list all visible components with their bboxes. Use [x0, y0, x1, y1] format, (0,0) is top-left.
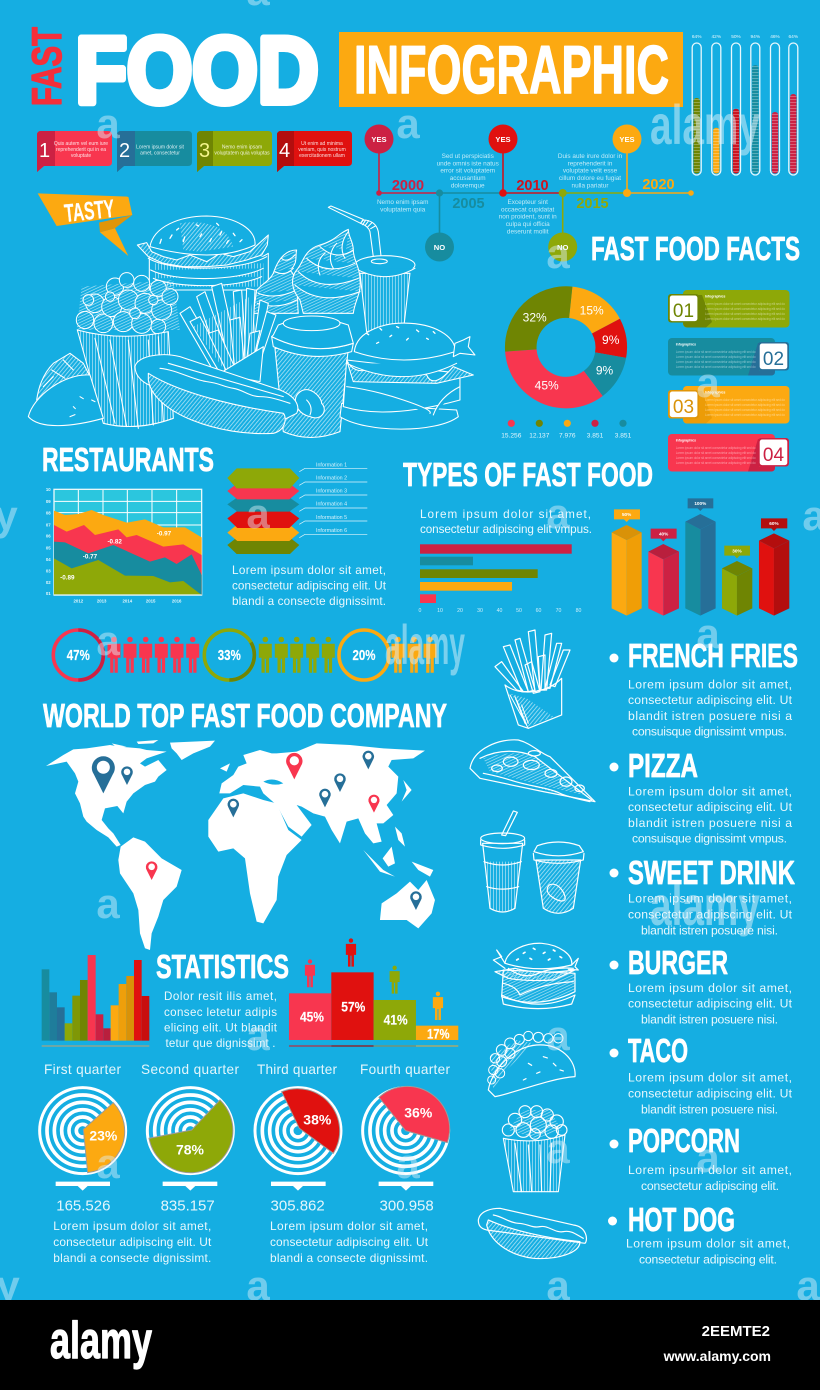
area chart: 2015	[146, 598, 156, 603]
item: SWEET DRINK	[610, 854, 795, 937]
card 01: Lorem ipsum dolor sit amet consectetur adipiscing elit sed do	[705, 312, 785, 316]
icon: burger	[493, 943, 578, 1009]
item: SWEET DRINK: consectetur adipiscing elit. Ut	[628, 907, 793, 921]
box 4	[277, 131, 352, 172]
timeline: 2010	[516, 178, 549, 194]
item: POPCORN: consectetur adipiscing elit.	[641, 1179, 779, 1193]
timeline	[364, 124, 694, 262]
quarter labels: First quarter	[44, 1062, 121, 1077]
watermarks: a	[796, 1262, 820, 1309]
3D column chart: 30%	[732, 548, 742, 553]
icon: popcorn	[502, 1106, 567, 1192]
area chart: -0.77	[83, 553, 98, 560]
item: FRENCH FRIES: consectetur adipiscing elit. Ut	[628, 693, 793, 707]
timeline: 2020	[642, 177, 675, 193]
item: FRENCH FRIES	[610, 637, 798, 739]
item: HOT DOG: HOT DOG	[628, 1201, 735, 1238]
area chart: 2013	[97, 598, 107, 603]
horizontal bar chart: 20	[457, 608, 463, 614]
box 1: voluptate	[71, 153, 91, 159]
watermarks: alamy	[650, 93, 760, 156]
box 2: amet, consectetur	[140, 150, 180, 156]
area chart: 2014	[123, 598, 133, 603]
percentage ring and people: 20%	[339, 630, 436, 680]
stacked hexagon diagram: Information 4	[316, 502, 347, 508]
donut legend	[501, 420, 632, 440]
timeline: non proident, sunt in	[499, 214, 557, 221]
area chart: 09	[46, 499, 51, 504]
stacked hexagon diagram: Information 5	[316, 515, 347, 521]
stacked hexagon diagram: Information 3	[316, 489, 347, 495]
horizontal bar chart: 10	[437, 608, 443, 614]
text: restaurants description: consectetur adipiscing elit. Ut	[232, 580, 387, 592]
card 02: Lorem ipsum dolor sit amet consectetur adipiscing elit sed do	[676, 350, 756, 354]
item: SWEET DRINK: blandit istren posuere nisi.	[641, 923, 778, 937]
watermarks: a	[246, 1012, 270, 1059]
timeline: YES	[495, 135, 511, 144]
donut legend: 7.976	[559, 432, 576, 440]
watermarks: a	[246, 1262, 270, 1309]
box 3: voluptatem quia voluptas	[214, 150, 270, 156]
podium chart with people	[289, 938, 458, 1047]
item: TACO: blandit istren posuere nisi.	[641, 1102, 778, 1116]
3D column chart: 50%	[622, 512, 632, 517]
ribbon: TASTY: TASTY	[63, 195, 116, 228]
sketch: coffee cup	[272, 316, 353, 437]
text: types description: Lorem ipsum dolor sit amet,	[420, 508, 591, 521]
card 01: 01	[673, 301, 694, 322]
horizontal bar chart: 0	[419, 608, 422, 614]
card 01: Lorem ipsum dolor sit amet consectetur adipiscing elit sed do	[705, 307, 785, 311]
text: types description: consectetur adipiscing elit vmpus.	[420, 523, 592, 536]
text: quarter description left: consectetur adipiscing elit. Ut	[53, 1235, 212, 1249]
horizontal bar chart: 30	[477, 608, 483, 614]
box 1	[37, 131, 112, 172]
sketch: french fries	[180, 283, 276, 382]
percentage ring and people: 33%	[204, 630, 335, 680]
card 04: Lorem ipsum dolor sit amet consectetur adipiscing elit sed do	[676, 461, 756, 465]
radial: fourth quarter: 36%	[404, 1105, 433, 1121]
watermarks: a	[96, 1140, 120, 1187]
title: FAST FOOD: FOOD	[76, 18, 318, 122]
item: HOT DOG	[608, 1201, 790, 1266]
area chart: 2016	[172, 598, 182, 603]
card 02	[668, 338, 789, 376]
card 02: Lorem ipsum dolor sit amet consectetur adipiscing elit sed do	[676, 355, 756, 359]
watermarks: a	[96, 100, 120, 147]
box 1: Quis autem vel eum iure	[54, 141, 108, 147]
box 2	[117, 131, 192, 172]
donut chart	[505, 286, 627, 408]
box 3: 3	[199, 140, 210, 162]
podium chart with people: 45%	[300, 1008, 324, 1024]
radial: second quarter	[147, 1088, 233, 1215]
card 01	[668, 290, 790, 328]
text: types description	[420, 508, 592, 536]
timeline: Duis aute irure dolor in	[558, 153, 623, 160]
quarter labels: Third quarter	[257, 1062, 337, 1077]
donut chart: 45%	[535, 378, 559, 392]
donut legend: 3.851	[615, 432, 632, 440]
watermarks: a	[696, 610, 720, 657]
card 02: Lorem ipsum dolor sit amet consectetur adipiscing elit sed do	[676, 360, 756, 364]
item: PIZZA: consuisque dignissimt vmpus.	[632, 832, 787, 846]
timeline: occaecat cupidatat	[501, 206, 555, 213]
icon: drinks	[481, 811, 584, 913]
card 03: Lorem ipsum dolor sit amet consectetur adipiscing elit sed do	[705, 413, 785, 417]
text: statistics description	[164, 990, 278, 1050]
card 04: Lorem ipsum dolor sit amet consectetur adipiscing elit sed do	[676, 456, 756, 460]
donut legend: 15.256	[501, 432, 522, 440]
timeline: 2005	[452, 196, 485, 212]
text: quarter description right	[270, 1219, 429, 1265]
sketch: drink cup with straw	[328, 206, 415, 332]
horizontal bar chart: 60	[536, 608, 541, 614]
3D column chart: 100%	[694, 501, 707, 506]
card 04: Lorem ipsum dolor sit amet consectetur adipiscing elit sed do	[676, 451, 756, 455]
area chart: -0.97	[157, 530, 172, 537]
item: HOT DOG: consectetur adipiscing elit.	[639, 1252, 777, 1266]
illustration: fast food collage	[28, 206, 475, 437]
text: restaurants description	[232, 564, 387, 608]
timeline: nulla pariatur	[572, 182, 609, 189]
timeline: deserunt mollit	[507, 228, 549, 235]
stacked hexagon diagram: Information 2	[316, 476, 347, 482]
timeline: unde omnis iste natus	[437, 160, 499, 167]
text: statistics description: elicing elit. Ut blandit	[164, 1022, 278, 1034]
item: SWEET DRINK: Lorem ipsum dolor sit amet,	[628, 892, 792, 906]
item: BURGER: Lorem ipsum dolor sit amet,	[628, 981, 792, 995]
text: statistics description: Dolor resit ilis amet,	[164, 990, 277, 1003]
box 4: Ut enim ad minima	[301, 141, 343, 147]
watermarks: a	[546, 1125, 570, 1172]
stacked hexagon diagram: Information 6	[316, 528, 347, 534]
footer band: 2EEMTE2	[702, 1323, 770, 1340]
box 4: exercitationem ullam	[299, 153, 345, 159]
item: POPCORN: Lorem ipsum dolor sit amet,	[628, 1163, 792, 1177]
sketch: small ice cream	[253, 250, 298, 313]
area chart: 06	[46, 534, 51, 539]
heading: WORLD TOP FAST FOOD COMPANY: WORLD TOP FAST FOOD COMPANY	[43, 697, 447, 734]
footer band: www.alamy.com	[663, 1348, 771, 1364]
card 01: Lorem ipsum dolor sit amet consectetur adipiscing elit sed do	[705, 317, 785, 321]
donut chart: 9%	[602, 333, 620, 347]
timeline: NO	[434, 243, 445, 252]
radial: first quarter: 165.526	[56, 1198, 110, 1215]
watermarks: a	[696, 1134, 720, 1181]
stacked hexagon diagram	[227, 462, 367, 554]
card 02: Lorem ipsum dolor sit amet consectetur adipiscing elit sed do	[676, 365, 756, 369]
area chart: 07	[46, 523, 51, 528]
item: PIZZA: Lorem ipsum dolor sit amet,	[628, 784, 792, 798]
timeline: error sit voluptatem	[440, 168, 495, 175]
item: PIZZA: PIZZA	[628, 747, 698, 784]
area chart	[46, 487, 202, 603]
donut chart: 32%	[523, 310, 547, 324]
area chart: 02	[46, 580, 51, 585]
area chart: -0.89	[60, 575, 75, 582]
watermarks: a	[246, 490, 270, 537]
donut legend: 12.137	[529, 432, 550, 440]
percentage ring and people: 20%: 20%	[352, 647, 376, 664]
card 04: Lorem ipsum dolor sit amet consectetur adipiscing elit sed do	[676, 446, 756, 450]
item: FRENCH FRIES: consuisque dignissimt vmpus.	[632, 725, 787, 739]
text: quarter description right: blandi a consecte dignissimt.	[270, 1251, 428, 1265]
podium chart with people: 17%	[427, 1026, 450, 1042]
watermarks: a	[96, 617, 120, 664]
numbered speech boxes	[37, 131, 352, 172]
progress tubes: 64%	[692, 34, 702, 40]
timeline: accusantium	[450, 175, 486, 182]
timeline: YES	[371, 135, 387, 144]
watermarks: a	[396, 100, 420, 147]
card 03	[668, 386, 790, 424]
radial: fourth quarter	[363, 1086, 450, 1215]
card 01: Lorem ipsum dolor sit amet consectetur adipiscing elit sed do	[705, 302, 785, 306]
heading panel: INFOGRAPHIC	[339, 32, 683, 108]
area chart: 08	[46, 510, 51, 515]
footer band	[0, 1300, 820, 1390]
watermarks: a	[546, 490, 570, 537]
percentage ring and people: 47%: 47%	[67, 647, 90, 664]
sketch: back burger	[137, 216, 268, 290]
horizontal bar chart	[419, 544, 581, 614]
donut chart: 9%	[596, 364, 614, 378]
radial: fourth quarter: 300.958	[380, 1198, 434, 1215]
icon: french fries	[495, 630, 570, 728]
item: PIZZA	[610, 747, 793, 846]
3D column chart: 40%	[659, 531, 669, 536]
footer band: alamy	[50, 1312, 152, 1370]
area chart: 01	[46, 591, 51, 596]
item: TACO: consectetur adipiscing elit. Ut	[628, 1086, 793, 1100]
stacked hexagon diagram: Information 1	[316, 462, 347, 468]
timeline: Nemo enim ipsam	[377, 199, 428, 206]
timeline: 2015	[576, 196, 609, 212]
heading: STATISTICS: STATISTICS	[156, 948, 289, 985]
info cards 01-04	[668, 290, 790, 472]
radial: second quarter: 78%	[176, 1142, 205, 1158]
timeline: voluptate velit esse	[563, 168, 618, 175]
area chart: 03	[46, 568, 51, 573]
item: BURGER: consectetur adipiscing elit. Ut	[628, 997, 793, 1011]
box 1: 1	[39, 140, 50, 162]
watermarks: a	[396, 1140, 420, 1187]
item: PIZZA: consectetur adipiscing elit. Ut	[628, 800, 793, 814]
text: quarter description right: consectetur adipiscing elit. Ut	[270, 1235, 429, 1249]
timeline: cillum dolore eu fugiat	[559, 175, 621, 182]
item: POPCORN: POPCORN	[628, 1122, 740, 1159]
item: BURGER: blandit istren posuere nisi.	[641, 1012, 778, 1026]
podium chart with people: 57%	[341, 998, 366, 1014]
item: PIZZA: blandit istren posuere nisi a	[628, 816, 792, 830]
item: BURGER	[610, 944, 793, 1026]
radial: third quarter: 38%	[303, 1111, 332, 1127]
percentage ring and people: 47%	[53, 630, 199, 680]
timeline: Sed ut perspiciatis	[442, 153, 494, 160]
progress tubes: 46%	[770, 34, 781, 40]
item: FRENCH FRIES: Lorem ipsum dolor sit amet,	[628, 678, 792, 692]
percentage ring and people: 33%: 33%	[218, 647, 241, 664]
box 3: Nemo enim ipsam	[222, 144, 262, 150]
box 3	[197, 131, 272, 172]
watermarks: a	[96, 880, 120, 927]
title: FAST FOOD: FAST	[23, 27, 70, 106]
watermarks: a	[546, 1012, 570, 1059]
item: TACO: Lorem ipsum dolor sit amet,	[628, 1071, 792, 1085]
card 02: 02	[763, 349, 784, 370]
area chart: 04	[46, 557, 51, 562]
progress tubes: 94%	[750, 34, 761, 40]
progress tubes: 64%	[788, 34, 799, 40]
3D column chart	[612, 498, 789, 616]
area chart: -0.82	[107, 538, 122, 545]
sketch: taco	[28, 353, 103, 426]
text: statistics description: tetur que dignissimt .	[166, 1037, 276, 1050]
radial: second quarter: 835.157	[161, 1198, 215, 1215]
card 02: Infographics	[676, 342, 696, 346]
item: TACO	[610, 1032, 793, 1116]
timeline: YES	[619, 135, 635, 144]
timeline: NO	[557, 243, 568, 252]
podium chart with people: 41%	[384, 1012, 408, 1028]
timeline: Excepteur sint	[507, 199, 548, 206]
heading: TYPES OF FAST FOOD: TYPES OF FAST FOOD	[403, 456, 653, 493]
item: TACO: TACO	[628, 1032, 688, 1069]
progress tubes	[692, 34, 799, 175]
box 4: 4	[279, 140, 290, 162]
timeline: culpa qui officia	[506, 221, 550, 228]
timeline: doloremque	[451, 182, 485, 189]
card 04	[668, 434, 789, 472]
box 2: Lorem ipsum dolor sit	[136, 144, 185, 150]
watermarks: a	[546, 230, 570, 277]
horizontal bar chart: 70	[556, 608, 561, 614]
sketch: popcorn bucket	[76, 273, 180, 428]
3D column chart: 60%	[769, 521, 779, 526]
radial: first quarter: 23%	[89, 1128, 118, 1144]
card 04: 04	[763, 445, 784, 466]
world map with pins	[46, 740, 435, 950]
text: quarter description left: blandi a consecte dignissimt.	[53, 1251, 211, 1265]
item: BURGER: BURGER	[628, 944, 728, 981]
quarter labels	[44, 1062, 450, 1077]
item: HOT DOG: Lorem ipsum dolor sit amet,	[626, 1236, 790, 1250]
box 1: reprehenderit qui in ea	[56, 147, 106, 153]
sketch: hot dog	[135, 355, 298, 434]
horizontal bar chart: 40	[497, 608, 502, 614]
radial: first quarter	[40, 1088, 126, 1215]
radial: third quarter: 305.862	[271, 1198, 325, 1215]
icon: taco	[488, 1031, 575, 1097]
card 03: Lorem ipsum dolor sit amet consectetur adipiscing elit sed do	[705, 398, 785, 402]
box 4: veniam, quis nostrum	[298, 147, 346, 153]
donut chart: 15%	[580, 304, 604, 318]
timeline: reprehenderit in	[568, 160, 613, 167]
watermarks: alamy	[650, 874, 760, 937]
donut legend: 3.851	[587, 432, 604, 440]
text: restaurants description: blandi a consecte dignissimt.	[232, 595, 386, 608]
sketch: large ice cream	[293, 229, 360, 313]
quarter labels: Second quarter	[141, 1062, 239, 1077]
item: POPCORN	[610, 1122, 792, 1193]
card 03: Infographics	[705, 390, 725, 394]
text: quarter description left: Lorem ipsum dolor sit amet,	[53, 1219, 211, 1233]
quarter labels: Fourth quarter	[360, 1062, 450, 1077]
card 04: Infographics	[676, 438, 696, 442]
watermarks: a	[696, 359, 720, 406]
watermarks: alamy	[385, 613, 465, 676]
area chart: 05	[46, 545, 51, 550]
card 03: Lorem ipsum dolor sit amet consectetur adipiscing elit sed do	[705, 408, 785, 412]
quarter radial charts	[40, 1086, 450, 1215]
heading: RESTAURANTS: RESTAURANTS	[42, 441, 214, 478]
progress tubes: 50%	[731, 34, 742, 40]
card 03: 03	[673, 397, 694, 418]
box 2: 2	[119, 140, 130, 162]
timeline: 2000	[392, 178, 424, 194]
area chart: 2012	[74, 598, 84, 603]
text: restaurants description: Lorem ipsum dolor sit amet,	[232, 564, 386, 577]
horizontal bar chart: 50	[516, 608, 522, 614]
radial: third quarter	[255, 1088, 341, 1215]
heading panel: INFOGRAPHIC: INFOGRAPHIC	[354, 32, 669, 108]
text: quarter description right: Lorem ipsum dolor sit amet,	[270, 1219, 428, 1233]
text: quarter description left	[53, 1219, 212, 1265]
timeline: voluptatem quia	[380, 206, 426, 213]
icon: pizza slice	[470, 740, 595, 802]
watermarks: a	[546, 1262, 570, 1309]
statistics color bars	[42, 955, 149, 1047]
sketch: front burger	[340, 323, 475, 429]
progress tubes: 42%	[711, 34, 722, 40]
item: FRENCH FRIES: blandit istren posuere nisi a	[628, 709, 792, 723]
card 01: Infographics	[705, 294, 725, 298]
horizontal bar chart: 80	[576, 608, 581, 614]
card 03: Lorem ipsum dolor sit amet consectetur adipiscing elit sed do	[705, 403, 785, 407]
ribbon: TASTY	[38, 193, 132, 256]
text: statistics description: consec letetur adipis	[164, 1006, 277, 1019]
icon: hot dog	[478, 1208, 586, 1259]
area chart: 10	[46, 487, 51, 492]
